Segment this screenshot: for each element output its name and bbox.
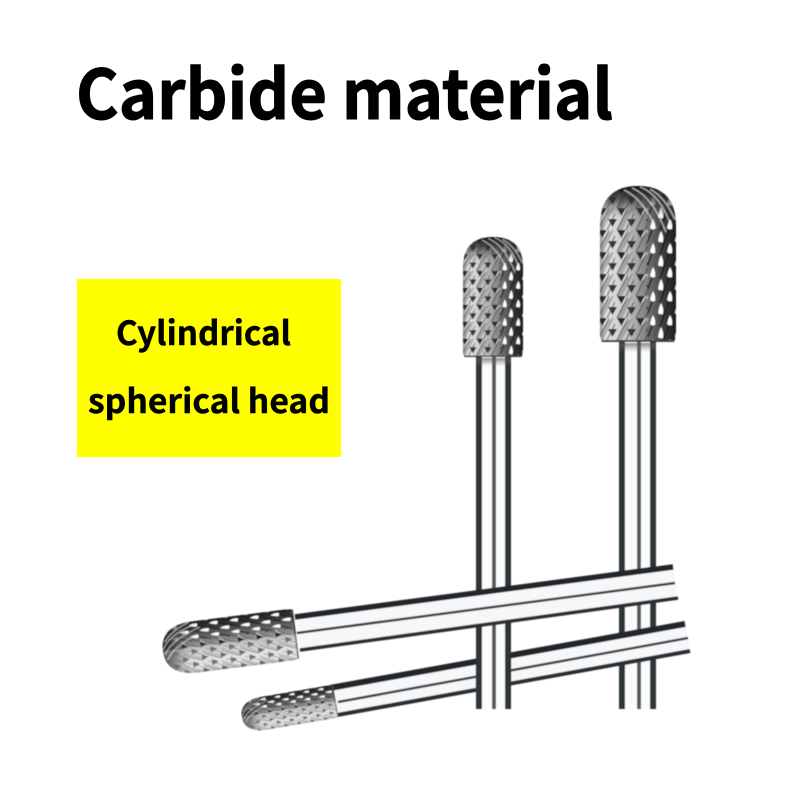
- cutting head: [600, 186, 676, 343]
- shank: [476, 355, 511, 709]
- shank: [295, 567, 678, 650]
- title: Carbide material: [76, 40, 613, 139]
- label line: spherical head: spherical head: [88, 375, 330, 423]
- burr: large lying: [160, 567, 678, 677]
- panel: yellow label: [77, 279, 341, 457]
- cutting head: [463, 237, 523, 358]
- label line: Cylindrical: Cylindrical: [116, 307, 291, 355]
- cutting head: [239, 684, 339, 733]
- shank: [619, 340, 656, 709]
- burr: small lying: [239, 624, 690, 733]
- burr: large upright: [600, 186, 676, 709]
- shank: [330, 624, 690, 715]
- cutting head: [160, 608, 300, 677]
- burr: small upright: [463, 237, 523, 709]
